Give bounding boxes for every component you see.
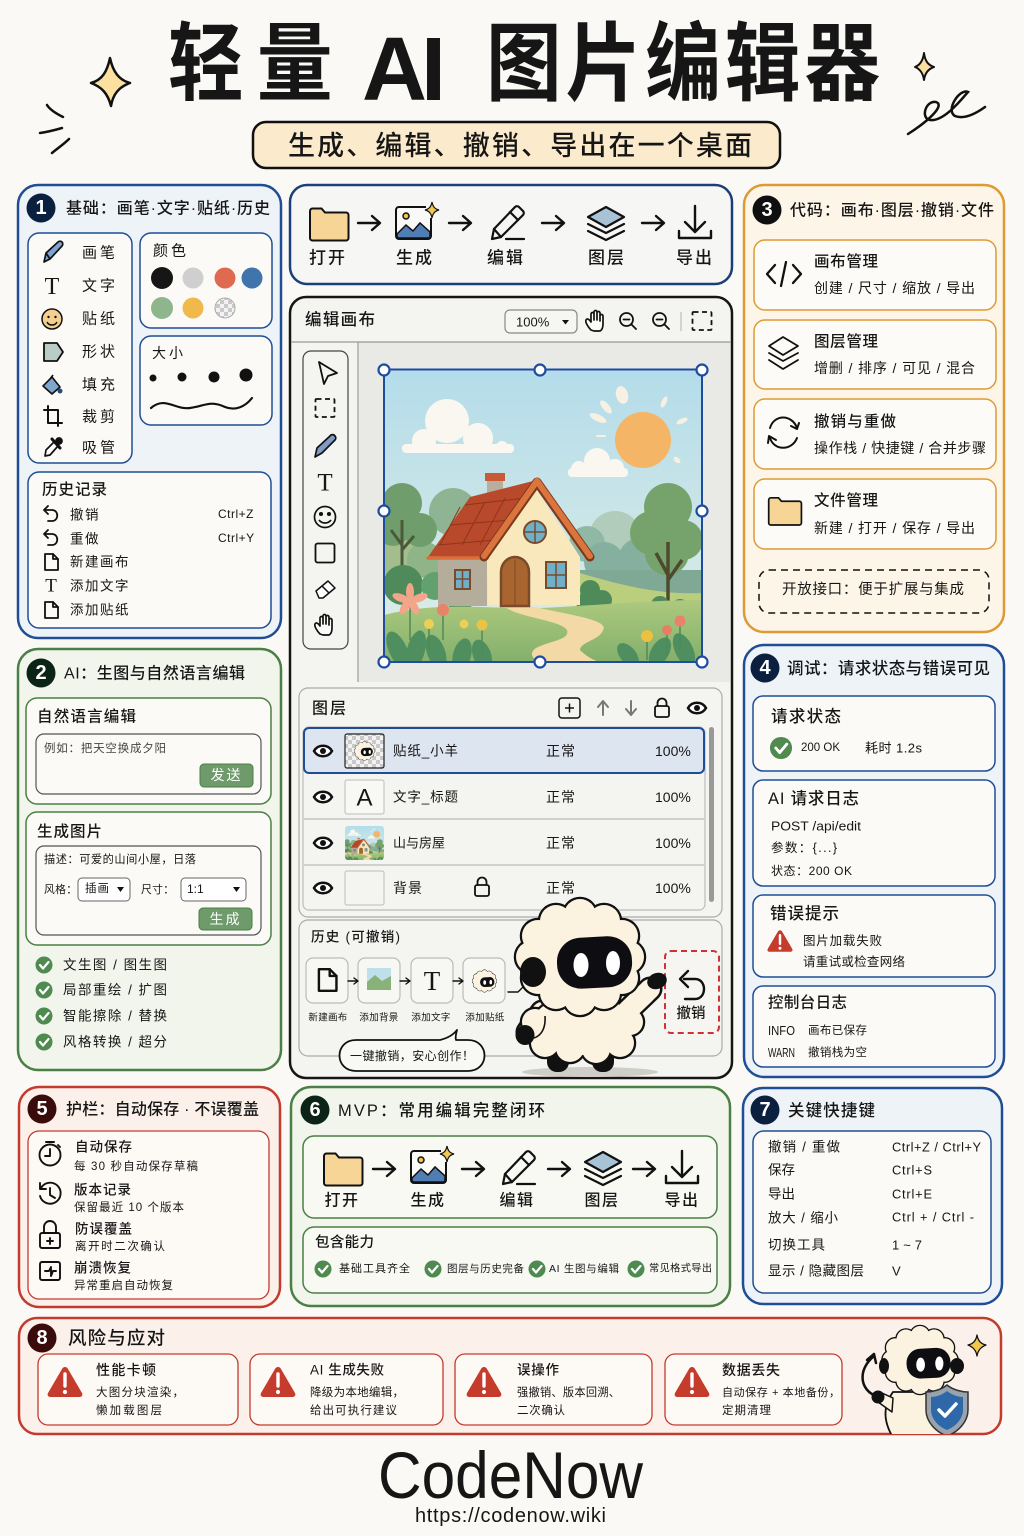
card: request status: 请求状态 [771, 707, 841, 726]
subtitle banner [253, 122, 780, 168]
guardrail list: 异常重启自动恢复 [74, 1278, 174, 1292]
scrollbar [709, 727, 714, 902]
tools list: 填充 [82, 376, 118, 394]
canvas illustration: cottage landscape [373, 369, 703, 674]
layer row: text [314, 780, 691, 814]
card: console log: 撤销栈为空 [808, 1045, 867, 1059]
card: AI request log [753, 780, 995, 886]
title: 图片编辑器 [486, 17, 880, 113]
risk: performance: 懒加载图层 [96, 1403, 162, 1417]
shortcut table [753, 1131, 991, 1293]
icon: version history [40, 1183, 61, 1204]
workflow labels: 导出 [676, 248, 714, 268]
vertical tool rail: T [317, 470, 333, 496]
shortcut table: 切换工具 [768, 1238, 825, 1252]
history timeline [299, 920, 722, 1056]
risk: AI failure: 降级为本地编辑， [310, 1385, 404, 1399]
tools list: 画笔 [82, 244, 118, 262]
shortcut table: 导出 [768, 1186, 795, 1202]
badge 4: 4 [759, 657, 771, 679]
panel 5: guardrails [19, 1087, 280, 1307]
risk: misoperation: 强撤销、版本回溯、 [517, 1385, 620, 1399]
heading 4: 调试：请求状态与错误可见 [787, 659, 990, 678]
panel 2: AI [18, 649, 281, 1070]
badge 5 [28, 1094, 56, 1124]
badge 6 [300, 1096, 330, 1124]
workflow labels [309, 248, 714, 268]
risk: performance: 大图分块渲染， [96, 1385, 184, 1399]
layers table frame [303, 727, 705, 910]
icon: eyedropper [45, 438, 62, 456]
card: console log: WARN [768, 1046, 795, 1060]
tools list: 贴纸 [82, 310, 118, 328]
icon: brush [44, 241, 63, 262]
workflow labels: 生成 [396, 248, 434, 268]
decoration: squiggle [908, 92, 985, 134]
card: request status: 耗时 1.2s [865, 740, 922, 756]
badge 1 [26, 194, 56, 222]
card: layer management: 图层管理 [814, 332, 878, 350]
icon: protect lock [40, 1221, 60, 1248]
card: AI request log: 参数：{...} [771, 840, 837, 855]
layers panel [299, 688, 722, 917]
card: console log [753, 986, 995, 1067]
toolbar icons [586, 310, 712, 331]
card: undo redo: 撤销与重做 [814, 412, 896, 430]
ground shadow [522, 1067, 658, 1077]
size picker: 大小 [152, 345, 186, 361]
card: undo redo [754, 399, 996, 469]
MVP capabilities: 包含能力 [315, 1233, 374, 1251]
risk: performance: 性能卡顿 [96, 1362, 156, 1378]
website url: https://codenow.wiki [415, 1505, 606, 1527]
card: layer management: 增删 / 排序 / 可见 / 混合 [814, 360, 975, 376]
workflow labels: 编辑 [487, 248, 525, 268]
MVP workflow: 生成 [410, 1192, 446, 1210]
history list [28, 472, 271, 628]
card: error hint: 图片加载失败 [803, 933, 882, 948]
generate image box: 生成 [210, 911, 242, 927]
MVP capabilities [303, 1227, 717, 1293]
decoration: right sparkle [915, 53, 934, 80]
title: A [362, 20, 427, 120]
panel 3: code [744, 185, 1004, 632]
sheep body [884, 1391, 941, 1434]
badge 1: 1 [35, 197, 47, 219]
history timeline: 添加文字 [411, 1012, 451, 1024]
AI feature checklist: 智能擦除 / 替换 [63, 1008, 168, 1024]
history list: 历史记录 [42, 480, 107, 498]
AI feature checklist: 局部重绘 / 扩图 [63, 982, 167, 998]
speech bubble: 一键撤销，安心创作！ [350, 1048, 474, 1063]
history list: 撤销 [70, 508, 100, 522]
shortcut table: 放大 / 缩小 [768, 1210, 838, 1226]
panel: editor window [290, 297, 732, 1078]
badge 8 [28, 1324, 56, 1352]
title: 轻量 [168, 17, 333, 113]
MVP capabilities: AI 生图与编辑 [549, 1262, 620, 1275]
history list: 新建画布 [70, 554, 130, 570]
card: canvas management [754, 240, 996, 310]
generate image box: 风格： [44, 882, 77, 896]
natural language box [26, 698, 271, 804]
card: canvas management: 创建 / 尺寸 / 缩放 / 导出 [814, 280, 975, 296]
risk: performance [38, 1354, 238, 1425]
card: error hint: 请重试或检查网络 [803, 954, 905, 969]
layer row: house: 100% [655, 835, 691, 851]
layers actions [559, 698, 706, 718]
guardrail list: 防误覆盖 [75, 1222, 132, 1236]
risk: data loss: 自动保存 + 本地备份， [722, 1385, 840, 1399]
MVP workflow: 打开 [324, 1192, 360, 1210]
layer row: text: 正常 [546, 789, 576, 805]
layer row: house: 山与房屋 [393, 836, 445, 850]
dashed note [759, 570, 989, 613]
layer row: text: 100% [655, 789, 691, 805]
mascot: sheep with shield [863, 1326, 968, 1442]
guardrail list [28, 1131, 269, 1299]
icon: export [679, 206, 711, 238]
shortcut table: Ctrl + / Ctrl - [892, 1210, 974, 1224]
icon: layers [588, 207, 624, 240]
icon: edit pen [492, 206, 524, 239]
layer row: house [314, 826, 691, 861]
generate image box [26, 812, 271, 945]
card: AI request log: POST /api/edit [771, 818, 861, 834]
undo button callout: 撤销 [676, 1004, 706, 1022]
heading 3: 代码：画布·图层·撤销·文件 [790, 200, 994, 220]
mascot: sheep [516, 899, 669, 1077]
card: error hint [753, 895, 995, 977]
history list: 添加文字 [70, 578, 130, 594]
history list: 重做 [70, 532, 100, 546]
speech bubble [340, 1030, 484, 1071]
brand logo: CodeNow [378, 1438, 643, 1512]
zoom select [505, 310, 577, 333]
canvas area background [359, 342, 730, 682]
history list: Ctrl+Y [218, 531, 255, 545]
panel 6: MVP [291, 1087, 730, 1306]
natural language box: 自然语言编辑 [37, 706, 136, 726]
badge 2: 2 [35, 662, 47, 684]
title: I [421, 20, 446, 120]
risk: data loss: 数据丢失 [722, 1362, 780, 1378]
tools list: 吸管 [82, 440, 118, 456]
shortcut table: 撤销 / 重做 [768, 1140, 840, 1154]
card: request status: 200 OK [801, 742, 840, 754]
guardrail list: 崩溃恢复 [74, 1260, 132, 1276]
icon: fill [43, 375, 62, 394]
history timeline: T [424, 966, 441, 996]
card: console log: INFO [768, 1024, 795, 1038]
MVP capabilities: 基础工具齐全 [339, 1261, 410, 1275]
shortcut table: V [892, 1264, 901, 1278]
workflow labels: 打开 [309, 248, 347, 268]
shortcut table: 1 ~ 7 [892, 1238, 922, 1252]
decoration: left sparkle [91, 58, 130, 106]
panel 7: shortcuts [743, 1088, 1002, 1304]
icon: gold star [968, 1335, 986, 1356]
shortcut table: Ctrl+S [892, 1162, 932, 1178]
shield [926, 1385, 968, 1436]
layers panel: 图层 [312, 700, 348, 718]
undo button callout [665, 951, 719, 1033]
badge 7 [750, 1096, 780, 1124]
panel 1: basics [18, 185, 281, 638]
history timeline: 添加背景 [359, 1012, 399, 1024]
shortcut table: Ctrl+E [892, 1186, 932, 1202]
hand [872, 1390, 884, 1404]
generate image box: 描述：可爱的山间小屋，日落 [44, 852, 196, 866]
tools list: 文字 [82, 278, 118, 294]
badge 8: 8 [36, 1327, 48, 1349]
badge 3: 3 [761, 199, 773, 221]
AI feature checklist [36, 956, 168, 1050]
badge 5: 5 [36, 1098, 48, 1120]
layer row: background: 正常 [546, 880, 576, 896]
risk: data loss [665, 1354, 842, 1425]
MVP workflow: 编辑 [499, 1192, 535, 1210]
legs [547, 1040, 614, 1072]
risk: misoperation [455, 1354, 652, 1425]
guardrail list: 自动保存 [75, 1140, 132, 1154]
badge 6: 6 [309, 1099, 321, 1121]
layer row: background [314, 871, 691, 905]
card: console log: 画布已保存 [808, 1023, 867, 1037]
dashed note: 开放接口：便于扩展与集成 [782, 581, 964, 598]
layer row: text: A [356, 784, 373, 812]
MVP workflow [303, 1136, 717, 1218]
risk: misoperation: 二次确认 [517, 1403, 566, 1417]
natural language box: 例如：把天空换成夕阳 [44, 741, 166, 755]
layer row: sticker [304, 728, 704, 773]
heading 2: AI：生图与自然语言编辑 [64, 664, 245, 682]
AI feature checklist: 文生图 / 图生图 [63, 958, 167, 972]
workflow labels: 图层 [588, 248, 626, 268]
heading 5: 护栏：自动保存 · 不误覆盖 [66, 1100, 259, 1118]
layer row: text: 文字_标题 [393, 790, 458, 804]
card: canvas management: 画布管理 [814, 252, 878, 270]
zoom select: 100% [516, 314, 550, 330]
MVP workflow: 导出 [664, 1192, 700, 1210]
panel: workflow strip [290, 185, 732, 284]
MVP capabilities: 图层与历史完备 [447, 1262, 524, 1275]
history timeline: 历史 (可撤销) [311, 928, 400, 944]
risk: AI failure: 给出可执行建议 [310, 1403, 398, 1417]
layer row: sticker: 贴纸_小羊 [393, 744, 458, 758]
history list: 添加贴纸 [70, 602, 130, 618]
card: file management [754, 479, 996, 549]
icon: text tool: T [45, 274, 60, 300]
layer row: house: 正常 [546, 835, 576, 851]
head [516, 899, 644, 1015]
risk: AI failure [250, 1354, 443, 1425]
card: console log: 控制台日志 [768, 992, 847, 1012]
badge 7: 7 [759, 1099, 771, 1121]
guardrail list: 离开时二次确认 [75, 1239, 166, 1253]
panel 4: debug [744, 645, 1004, 1077]
history timeline: 添加贴纸 [465, 1012, 505, 1024]
ears [879, 1358, 964, 1374]
card: file management: 文件管理 [814, 490, 878, 510]
layer row: sticker: 正常 [546, 743, 576, 759]
heading 6: MVP：常用编辑完整闭环 [338, 1100, 545, 1120]
risk: data loss: 定期清理 [722, 1403, 772, 1417]
title [168, 17, 880, 120]
badge 2 [26, 658, 56, 688]
icon: crop [44, 406, 62, 426]
heading 7: 关键快捷键 [788, 1101, 875, 1120]
history timeline: 新建画布 [308, 1012, 348, 1024]
generate image box: 1:1 [187, 882, 204, 896]
heading 8: 风险与应对 [68, 1328, 165, 1348]
heading 1: 基础：画笔·文字·贴纸·历史 [66, 198, 270, 218]
tools list: 形状 [82, 344, 118, 360]
history list: T [45, 576, 57, 596]
card: AI request log: AI 请求日志 [768, 789, 859, 808]
risk: AI failure: AI 生成失败 [310, 1362, 384, 1378]
vertical tool rail [303, 351, 348, 649]
shortcut table: Ctrl+Z / Ctrl+Y [892, 1140, 981, 1154]
body [522, 995, 643, 1063]
risk: misoperation: 误操作 [517, 1362, 560, 1378]
icon: crash recovery [40, 1262, 60, 1280]
guardrail list: 版本记录 [74, 1182, 131, 1198]
colour palette [140, 233, 272, 328]
card: AI request log: 状态：200 OK [771, 864, 852, 878]
size picker [140, 336, 272, 425]
ear [520, 957, 546, 987]
shortcut table: 保存 [768, 1162, 795, 1178]
colour palette: 颜色 [153, 242, 189, 260]
icon: shape [44, 343, 63, 361]
layer row: background: 100% [655, 880, 691, 896]
icon: sticker [42, 309, 62, 329]
decoration: burst lines [40, 105, 69, 153]
shortcut table: 显示 / 隐藏图层 [768, 1264, 864, 1278]
generate image box: 尺寸： [141, 882, 174, 896]
AI feature checklist: 风格转换 / 超分 [63, 1034, 167, 1050]
head [882, 1326, 958, 1394]
hands [516, 970, 669, 1045]
icon: generate image [396, 202, 439, 239]
natural language box: 发送 [210, 767, 242, 783]
icon: open folder [310, 208, 348, 240]
icon: timer [40, 1142, 60, 1166]
subtitle banner: 生成、编辑、撤销、导出在一个桌面 [288, 131, 752, 161]
history list: Ctrl+Z [218, 507, 254, 521]
panel 8: risks [19, 1318, 1001, 1442]
card: layer management [754, 320, 996, 389]
editor title: 编辑画布 [305, 310, 375, 329]
tools list: 裁剪 [82, 408, 118, 426]
guardrail list: 保留最近 10 个版本 [74, 1200, 184, 1214]
layer row: background: 背景 [393, 880, 423, 896]
layer row: sticker: 100% [655, 743, 691, 759]
card: request status [753, 696, 995, 771]
card: file management: 新建 / 打开 / 保存 / 导出 [814, 520, 975, 536]
generate image box: 生成图片 [37, 822, 102, 840]
card: error hint: 错误提示 [770, 904, 839, 923]
MVP workflow: 图层 [584, 1192, 620, 1210]
rotation arrow [863, 1356, 876, 1396]
guardrail list: 每 30 秒自动保存草稿 [74, 1159, 198, 1173]
arms [528, 989, 650, 1032]
selection frame and handles [378, 364, 708, 668]
MVP capabilities: 常见格式导出 [649, 1262, 712, 1274]
generate image box: 插画 [85, 881, 109, 895]
badge 4 [750, 654, 780, 682]
badge 3 [752, 196, 782, 224]
card: undo redo: 操作栈 / 快捷键 / 合并步骤 [814, 440, 986, 456]
tools list [28, 233, 132, 463]
